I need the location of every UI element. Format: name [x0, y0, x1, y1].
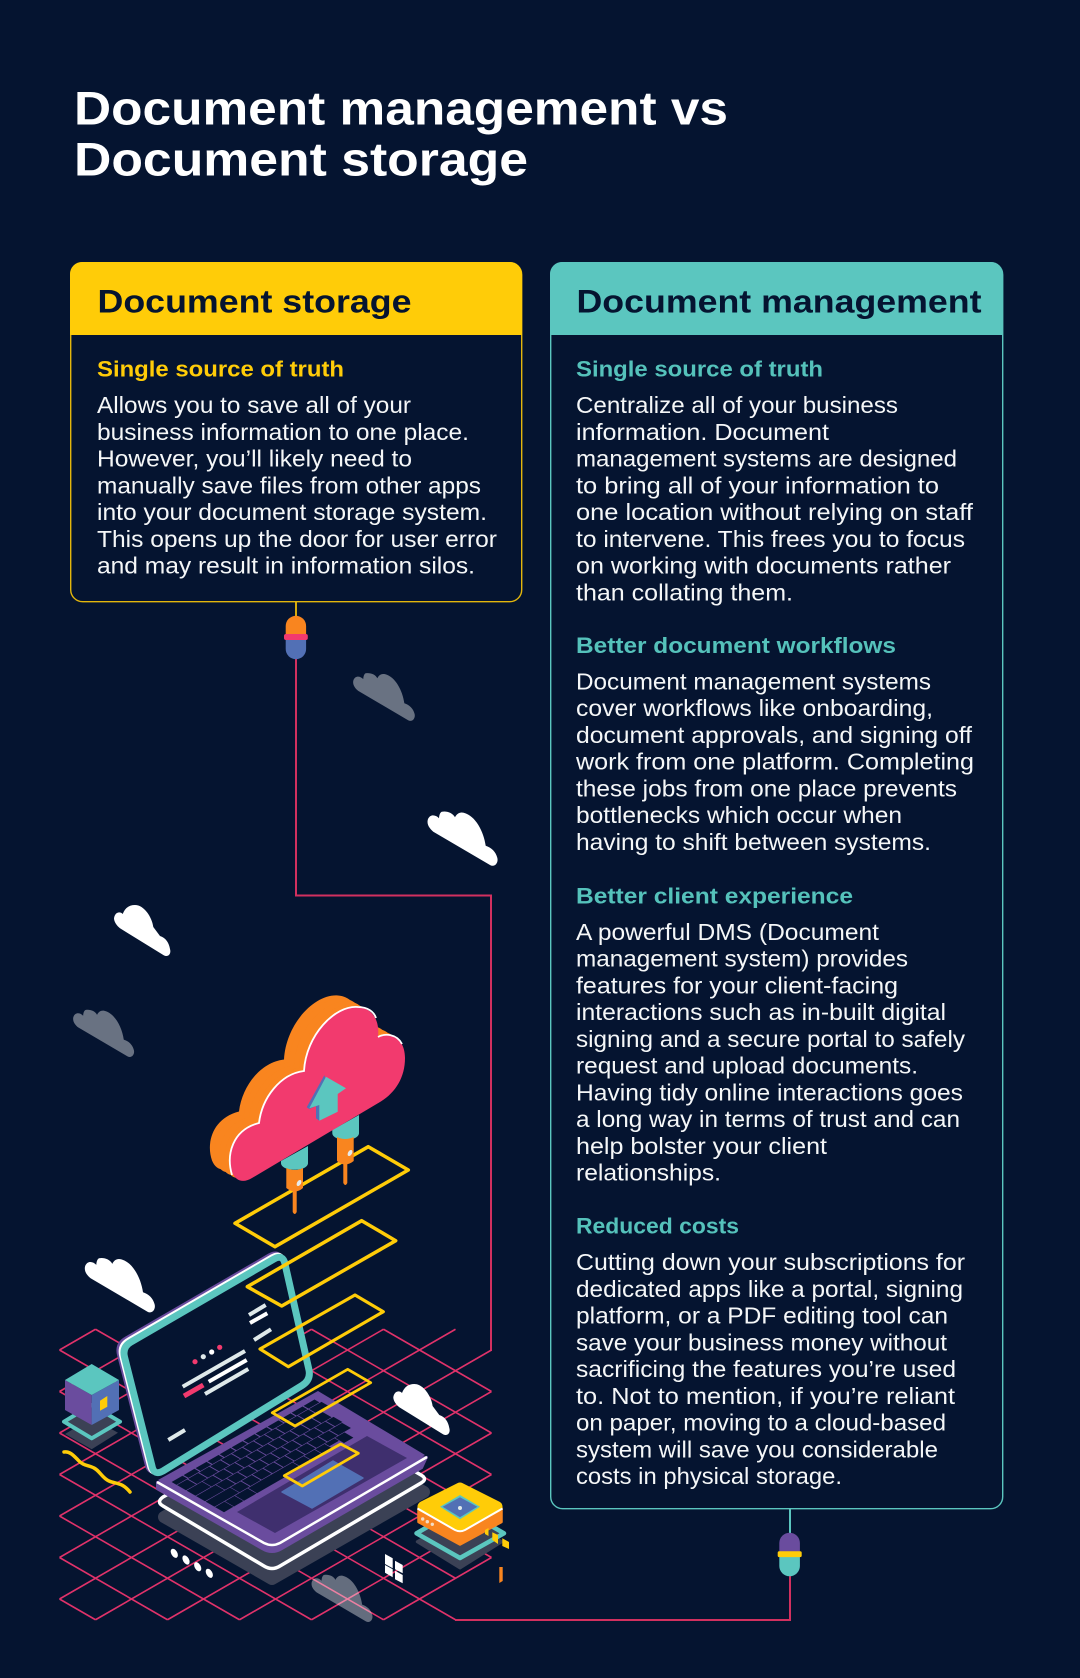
cloud: white right of laptop: [393, 1384, 450, 1435]
section: better client experience: interactions such as in-built digital: [576, 999, 946, 1025]
section: better document workflows: cover workflows like onboarding,: [576, 695, 933, 721]
section: better client experience: A powerful DMS (Document: [576, 919, 879, 945]
cloud: grey top: [353, 673, 415, 721]
cloud: grey left: [73, 1010, 134, 1057]
screen content: [168, 1305, 271, 1440]
yellow data frame 3: [260, 1295, 383, 1367]
section: reduced costs: to. Not to mention, if you’re reliant: [576, 1383, 955, 1409]
yellow data frame 2: [247, 1221, 396, 1306]
section: reduced costs: costs in physical storage.: [576, 1463, 842, 1489]
panel: document storage: [70, 262, 522, 602]
cloud highlight: [230, 1007, 402, 1175]
isometric grid: [60, 1329, 492, 1620]
yellow data frame 4: [272, 1369, 371, 1426]
section: single source of truth: to intervene. This frees you to focus: [576, 526, 965, 552]
section: better document workflows: having to shift between systems.: [576, 829, 931, 855]
text block: storage description: However, you’ll likely need to: [97, 446, 412, 472]
icon: cloud with upload arrow: [210, 995, 405, 1214]
section: better client experience: signing and a secure portal to safely: [576, 1026, 965, 1052]
section: better client experience: help bolster your client: [576, 1133, 827, 1159]
section: better document workflows: work from one platform. Completing: [575, 748, 974, 774]
trackpad: [282, 1461, 363, 1508]
text block: storage description: [97, 392, 497, 578]
section: single source of truth: to bring all of your information to: [576, 472, 939, 498]
section: single source of truth: Centralize all of your business: [576, 392, 898, 418]
text block: storage description: This opens up the door for user error: [97, 526, 497, 552]
icon: purple and teal connector plug: [778, 1533, 802, 1576]
section: better client experience: a long way in terms of trust and can: [576, 1106, 960, 1132]
subheading: single source of truth: Single source of truth: [576, 356, 823, 382]
section: single source of truth: than collating them.: [576, 579, 793, 605]
section: reduced costs: system will save you considerable: [576, 1436, 938, 1462]
section: better document workflows: [575, 633, 974, 855]
cloud: white left: [114, 905, 170, 956]
connector: storage box to illustration: [296, 602, 491, 1351]
title: Document storage: [74, 134, 528, 186]
subheading: better client experience: Better client experience: [576, 883, 853, 908]
keyboard: [172, 1399, 368, 1512]
section: reduced costs: platform, or a PDF editing tool can: [576, 1302, 948, 1328]
section: better client experience: relationships.: [576, 1160, 721, 1186]
cloud: white above laptop: [85, 1258, 155, 1312]
section: reduced costs: save your business money without: [576, 1329, 947, 1355]
section: reduced costs: [576, 1213, 965, 1489]
cloud: grey translucent bottom: [312, 1575, 372, 1622]
heading: document storage: Document storage: [98, 284, 412, 320]
text block: storage description: and may result in information silos.: [97, 552, 475, 578]
heading: document management: Document management: [576, 284, 982, 320]
cloud peg right: [332, 1115, 359, 1185]
title: [74, 82, 728, 186]
cloud peg left: [281, 1146, 308, 1214]
section: better client experience: request and upload documents.: [576, 1052, 918, 1078]
laptop stand outline: [160, 1412, 424, 1568]
icon: orange and blue connector plug: [284, 616, 308, 659]
section: better client experience: Having tidy online interactions goes: [576, 1079, 963, 1105]
text block: storage description: business information to one place.: [97, 419, 469, 445]
section: reduced costs: dedicated apps like a portal, signing: [576, 1276, 963, 1302]
palm rest: [237, 1436, 407, 1533]
section: better document workflows: Document management systems: [576, 668, 931, 694]
section: single source of truth: one location without relying on staff: [576, 499, 973, 525]
section: reduced costs: sacrificing the features you’re used: [576, 1356, 956, 1382]
icon: white dots: [169, 1547, 214, 1579]
laptop base edge: [157, 1457, 427, 1552]
text block: storage description: Allows you to save all of your: [97, 392, 411, 418]
section: reduced costs: Cutting down your subscriptions for: [576, 1249, 965, 1275]
laptop stand shadow: [164, 1430, 424, 1579]
subheading: single source of truth: Single source of truth: [97, 356, 344, 382]
cloud front: [230, 1007, 405, 1181]
section: better client experience: [576, 883, 965, 1186]
icon: laptop: [120, 1255, 427, 1579]
subheading: reduced costs: Reduced costs: [576, 1213, 739, 1238]
icon: isometric cube: [64, 1364, 120, 1449]
icon: router box: [416, 1484, 509, 1583]
subheading: better document workflows: Better document workflows: [576, 633, 896, 658]
section: better client experience: management system) provides: [576, 946, 908, 972]
header bar: document storage: [70, 262, 522, 335]
screen highlight: [122, 1256, 308, 1471]
header bar: document management: [550, 262, 1003, 335]
section: single source of truth: on working with documents rather: [576, 552, 951, 578]
section: better document workflows: bottlenecks which occur when: [576, 802, 902, 828]
section: better document workflows: these jobs from one place prevents: [576, 775, 957, 801]
section: single source of truth: management systems are designed: [576, 446, 957, 472]
screen bezel: [124, 1257, 309, 1473]
laptop base top: [158, 1391, 425, 1544]
panel: document management: [550, 262, 1003, 1509]
cloud extrusion: [210, 995, 400, 1178]
text block: storage description: manually save files from other apps: [97, 472, 481, 498]
yellow squiggle: [64, 1452, 130, 1492]
section: better client experience: features for your client-facing: [576, 972, 898, 998]
text block: storage description: into your document storage system.: [97, 499, 487, 525]
section: single source of truth: [576, 356, 973, 605]
cloud: white top right: [428, 811, 498, 866]
section: single source of truth: information. Document: [576, 419, 829, 445]
section: better document workflows: document approvals, and signing off: [576, 722, 972, 748]
icon: white window tiles: [385, 1554, 403, 1583]
upload arrow: [307, 1075, 346, 1121]
connector: management box to illustration: [455, 1509, 790, 1620]
section: reduced costs: on paper, moving to a cloud-based: [576, 1410, 946, 1436]
screen back: [120, 1255, 305, 1470]
yellow data frame 5: [284, 1444, 358, 1486]
yellow data frame 1: [235, 1147, 408, 1247]
title: Document management vs: [74, 82, 728, 136]
